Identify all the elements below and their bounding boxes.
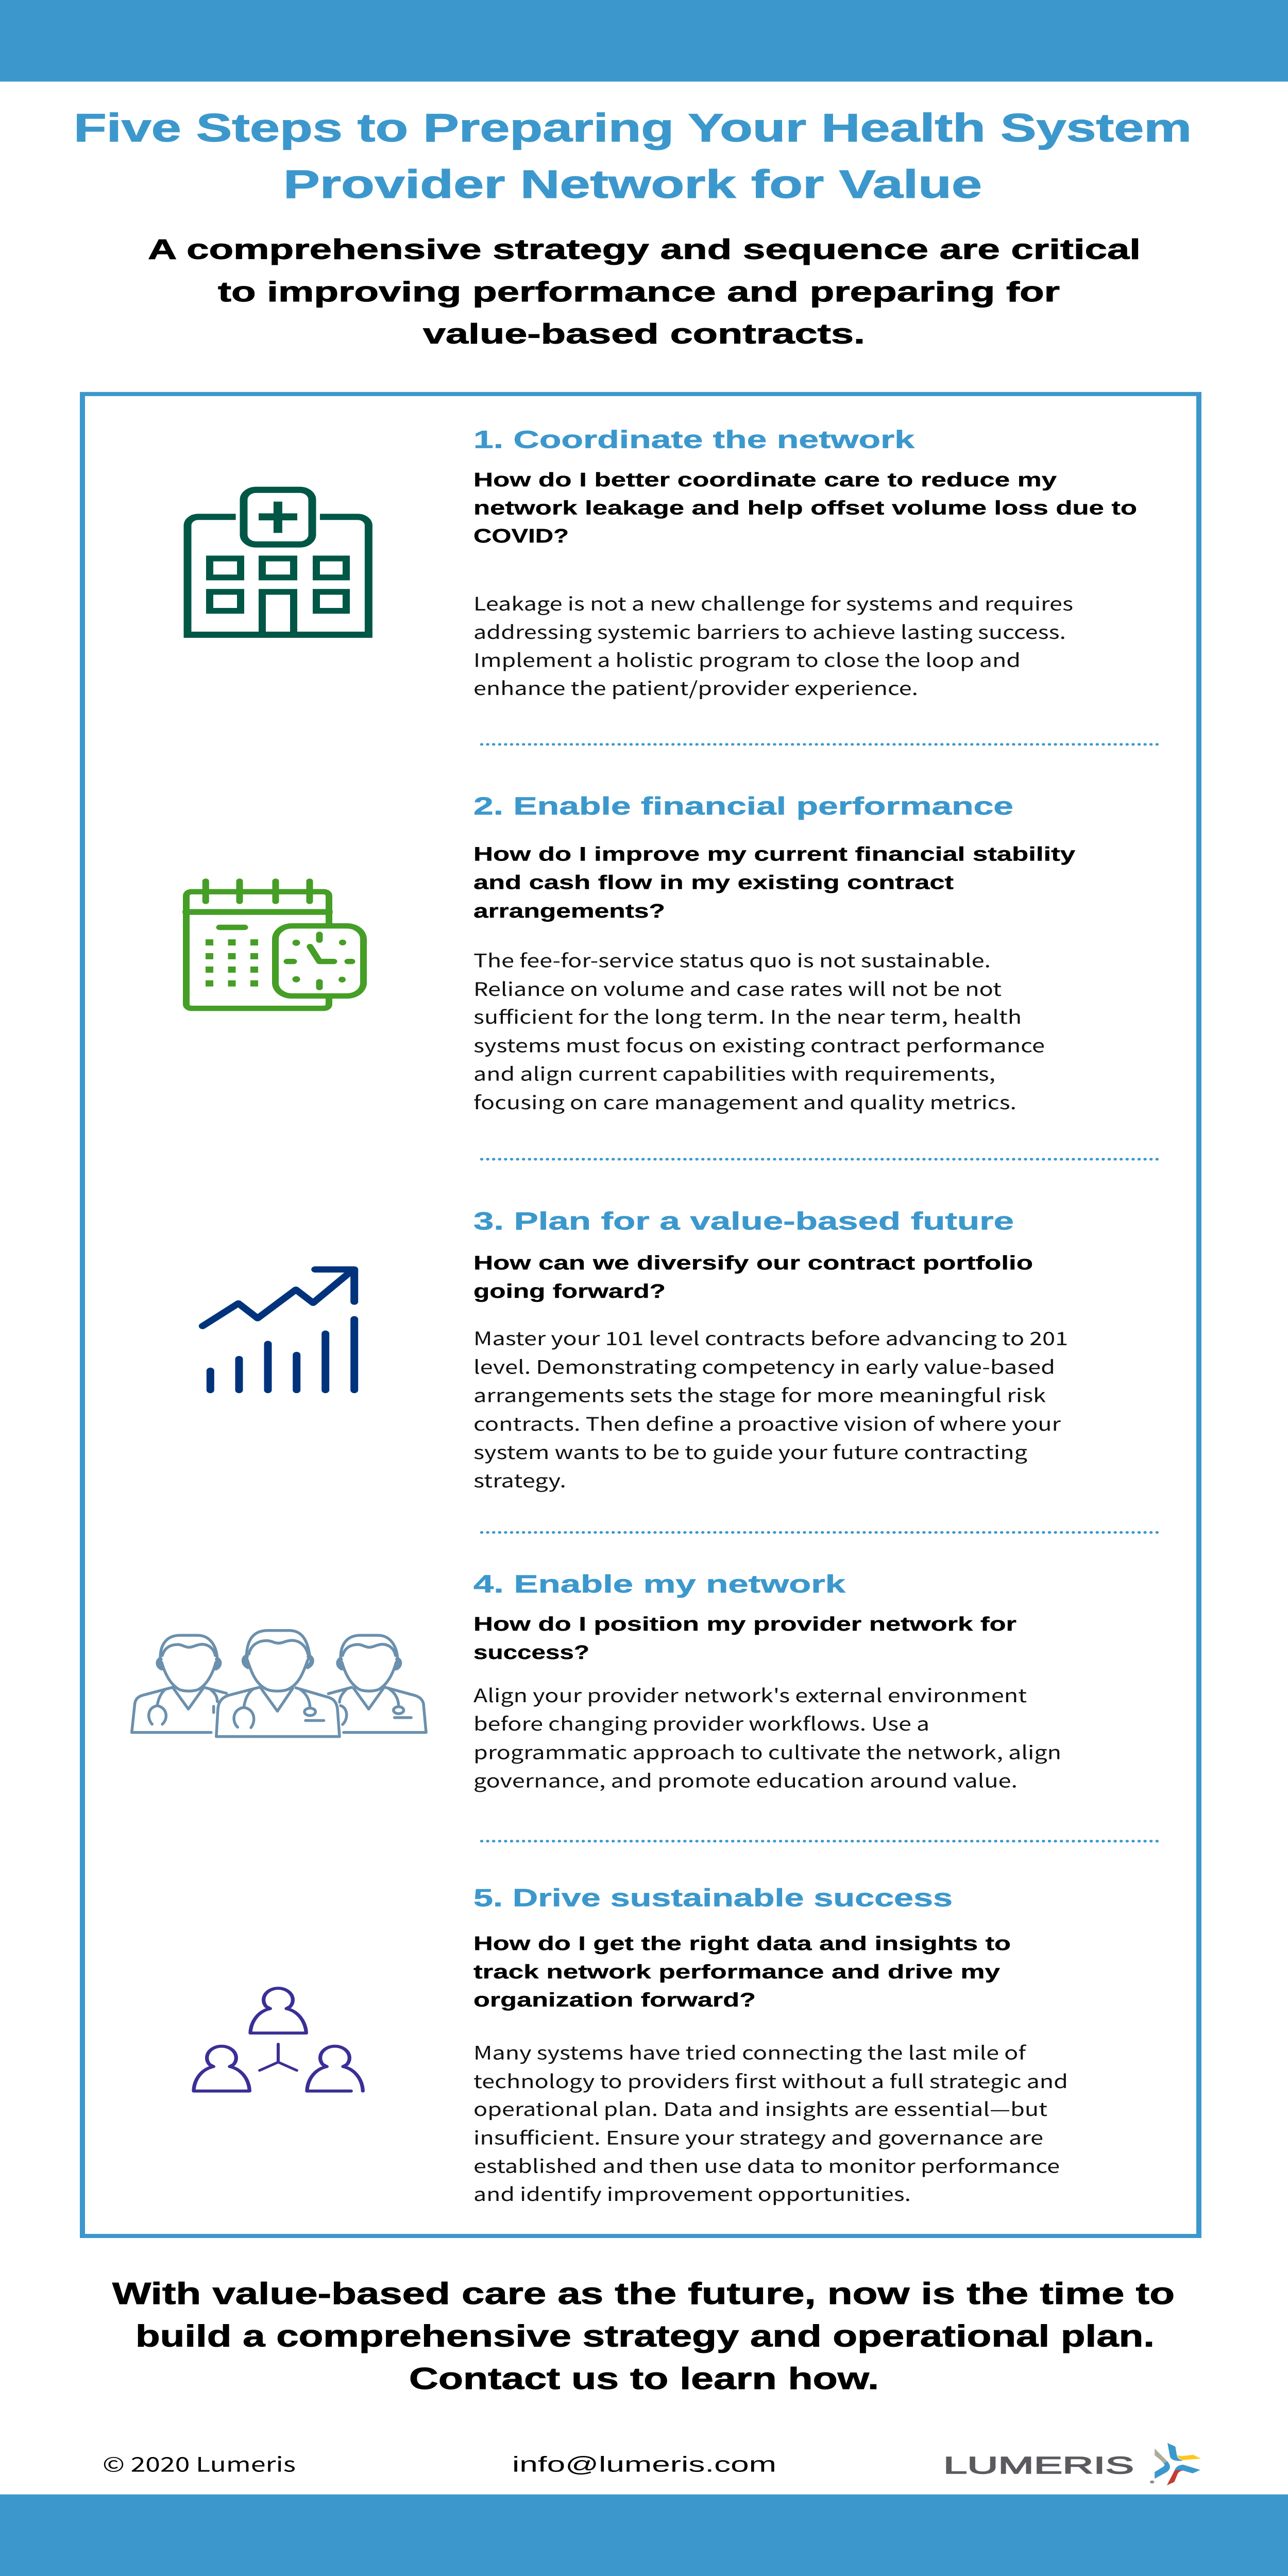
- question: step 3: How can we diversify our contract portfolio: [473, 1252, 1033, 1274]
- question: step 1: [473, 469, 1137, 547]
- icon: calendar and clock: [186, 881, 364, 1008]
- step 5: drive sustainable success: [194, 1884, 1068, 2207]
- question: step 4: How do I position my provider network for: [473, 1613, 1016, 1635]
- icon: connected people: [194, 1988, 363, 2091]
- question: step 1: How do I better coordinate care to reduce my: [473, 469, 1057, 491]
- bottom banner: [0, 2495, 1288, 2576]
- title: [74, 106, 1192, 207]
- body text: step 3: Master your 101 level contracts before advancing to 201: [473, 1324, 1068, 1351]
- top banner: [0, 0, 1288, 81]
- body text: step 2: [473, 946, 1045, 1114]
- question: step 2: arrangements?: [473, 900, 665, 922]
- heading: step 2: 2. Enable financial performance: [473, 792, 1013, 820]
- body text: step 3: [473, 1324, 1068, 1493]
- question: step 2: [473, 843, 1075, 922]
- subtitle: A comprehensive strategy and sequence are critical: [148, 234, 1141, 265]
- question: step 1: network leakage and help offset volume loss due to: [473, 497, 1137, 519]
- body text: step 2: sufficient for the long term. In the near term, health: [473, 1003, 1022, 1029]
- title: Provider Network for Value: [283, 162, 982, 207]
- call to action: [112, 2277, 1175, 2396]
- body text: step 1: enhance the patient/provider experience.: [473, 673, 918, 700]
- contact email: info@lumeris.com: [512, 2452, 776, 2476]
- icon: logo star: [1150, 2443, 1201, 2485]
- body text: step 1: Leakage is not a new challenge for systems and requires: [473, 589, 1073, 616]
- heading: step 1: 1. Coordinate the network: [473, 426, 915, 453]
- question: step 5: track network performance and drive my: [473, 1961, 1000, 1983]
- body text: step 4: programmatic approach to cultivate the network, align: [473, 1738, 1061, 1765]
- body text: step 1: Implement a holistic program to close the loop and: [473, 646, 1021, 672]
- body text: step 5: established and then use data to monitor performance: [473, 2151, 1060, 2178]
- panel: five steps frame: [82, 394, 1199, 2236]
- body text: step 2: The fee-for-service status quo is not sustainable.: [473, 946, 991, 973]
- body text: step 5: [473, 2038, 1068, 2207]
- step 3: plan for a value-based future: [202, 1207, 1068, 1493]
- body text: step 2: systems must focus on existing contract performance: [473, 1031, 1045, 1058]
- heading: step 3: 3. Plan for a value-based future: [473, 1207, 1014, 1235]
- icon: hospital: [188, 490, 368, 635]
- question: step 5: organization forward?: [473, 1989, 756, 2011]
- body text: step 3: contracts. Then define a proactive vision of where your: [473, 1409, 1061, 1436]
- heading: step 5: 5. Drive sustainable success: [473, 1884, 953, 1912]
- body text: step 5: operational plan. Data and insights are essential—but: [473, 2095, 1047, 2122]
- question: step 4: success?: [473, 1641, 589, 1664]
- body text: step 5: Many systems have tried connecting the last mile of: [473, 2038, 1027, 2065]
- step 1: coordinate the network: [188, 426, 1137, 700]
- step 2: enable financial performance: [186, 792, 1075, 1114]
- body text: step 4: [473, 1681, 1061, 1793]
- question: step 4: [473, 1613, 1016, 1664]
- call to action: Contact us to learn how.: [409, 2362, 879, 2396]
- copyright: © 2020 Lumeris: [103, 2449, 296, 2478]
- body text: step 2: and align current capabilities with requirements,: [473, 1059, 995, 1086]
- body text: step 5: insufficient. Ensure your strategy and governance are: [473, 2123, 1043, 2150]
- body text: step 5: and identify improvement opportunities.: [473, 2179, 911, 2207]
- body text: step 3: arrangements sets the stage for more meaningful risk: [473, 1381, 1046, 1408]
- body text: step 3: strategy.: [473, 1466, 566, 1493]
- body text: step 3: level. Demonstrating competency in early value-based: [473, 1352, 1055, 1379]
- subtitle: value-based contracts.: [423, 318, 865, 350]
- question: step 2: and cash flow in my existing contract: [473, 872, 954, 893]
- body text: step 2: Reliance on volume and case rates will not be not: [473, 974, 1002, 1001]
- icon: rising chart: [202, 1269, 354, 1390]
- body text: step 4: Align your provider network's external environment: [473, 1681, 1027, 1708]
- body text: step 4: governance, and promote education around value.: [473, 1766, 1018, 1793]
- question: step 2: How do I improve my current financial stability: [473, 843, 1075, 865]
- step 4: enable my network: [132, 1570, 1061, 1793]
- question: step 3: going forward?: [473, 1281, 666, 1302]
- title: Five Steps to Preparing Your Health System: [74, 106, 1192, 150]
- subtitle: [148, 234, 1141, 350]
- call to action: With value-based care as the future, now is the time to: [112, 2277, 1175, 2311]
- heading: step 4: 4. Enable my network: [473, 1570, 846, 1598]
- body text: step 4: before changing provider workflows. Use a: [473, 1709, 929, 1736]
- body text: step 1: addressing systemic barriers to achieve lasting success.: [473, 617, 1066, 645]
- body text: step 5: technology to providers first without a full strategic and: [473, 2066, 1068, 2093]
- logo: Lumeris: LUMERIS: [943, 2452, 1134, 2479]
- call to action: build a comprehensive strategy and operational plan.: [135, 2319, 1155, 2353]
- body text: step 3: system wants to be to guide your future contracting: [473, 1437, 1027, 1465]
- body text: step 2: focusing on care management and quality metrics.: [473, 1088, 1016, 1114]
- question: step 5: How do I get the right data and insights to: [473, 1933, 1011, 1955]
- body text: step 1: [473, 589, 1073, 700]
- icon: three doctors: [132, 1631, 426, 1737]
- question: step 1: COVID?: [473, 525, 569, 547]
- logo: Lumeris: [943, 2443, 1201, 2485]
- subtitle: to improving performance and preparing for: [218, 276, 1060, 308]
- question: step 5: [473, 1933, 1011, 2011]
- question: step 3: [473, 1252, 1033, 1302]
